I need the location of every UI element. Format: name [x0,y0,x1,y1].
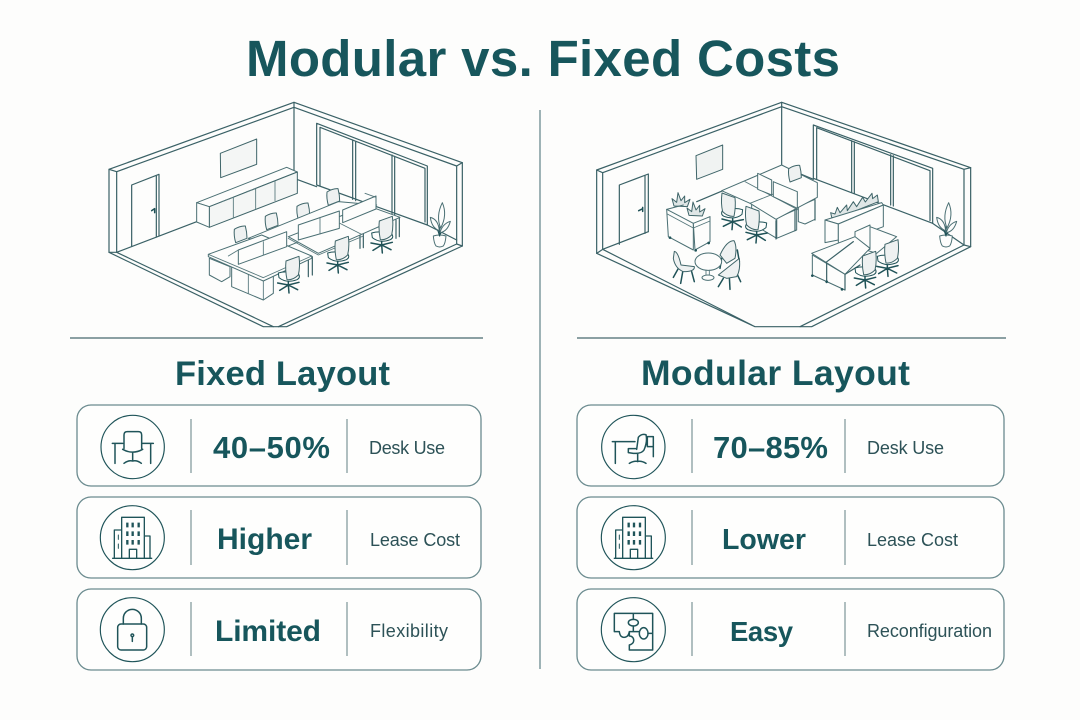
card: desk use 40–50% [77,405,481,486]
potted plant [430,203,450,247]
card: higher lease cost: Lease Cost [370,530,460,550]
rear bench desk [248,202,377,247]
desk partitions [228,193,376,264]
card: limited flexibility [77,589,481,670]
card: easy reconfiguration [577,589,1004,670]
card: limited flexibility: Limited [215,615,321,648]
front bench desk [208,235,312,300]
potted plant [937,203,957,247]
illustration: fixed office layout [109,102,462,327]
card: higher lease cost [77,497,481,578]
icon: desk and chair [101,415,164,479]
upper desk cluster [722,165,817,239]
card: lower lease cost [577,497,1004,578]
room shell [597,102,971,327]
lower desk cluster [811,225,897,291]
heading: modular layout: Modular Layout [641,353,910,393]
middle and right desks [288,208,400,255]
card: easy reconfiguration: Reconfiguration [867,621,992,641]
upper desk chairs [721,165,801,243]
icon: office building [100,506,164,570]
whiteboard [220,139,257,178]
heading: fixed layout: Fixed Layout [175,355,390,393]
window wall [813,125,933,223]
card: higher lease cost: Higher [217,523,312,556]
front swivel chairs [278,216,393,293]
card: desk use 70–85%: Desk Use [867,438,944,458]
card: lower lease cost: Lease Cost [867,530,958,550]
illustration: modular office layout [597,102,971,327]
window wall [317,123,427,225]
modular metric cards [577,405,1004,670]
card: easy reconfiguration: Easy [730,616,794,647]
card: limited flexibility: Flexibility [370,621,448,641]
icon: padlock [100,598,164,662]
round table and lounge chairs [673,241,741,289]
card: desk use 40–50%: Desk Use [369,438,445,458]
room shell [109,102,462,327]
planter left [667,193,710,252]
lower desk chairs [854,240,899,288]
card: desk use 70–85% [577,405,1004,486]
door [619,174,648,244]
rear chairs [234,189,340,243]
door [132,174,159,246]
icon: desk with side chair [602,415,665,479]
whiteboard [696,145,723,179]
card: lower lease cost: Lower [722,524,806,556]
title: Modular vs. Fixed Costs [246,30,840,87]
card: desk use 70–85%: 70–85% [713,430,828,465]
fixed metric cards [77,405,481,670]
planter right [825,193,883,243]
icon: puzzle pieces [601,598,665,662]
card: desk use 40–50%: 40–50% [213,430,330,465]
storage cabinet [197,167,297,227]
icon: office building [601,506,665,570]
